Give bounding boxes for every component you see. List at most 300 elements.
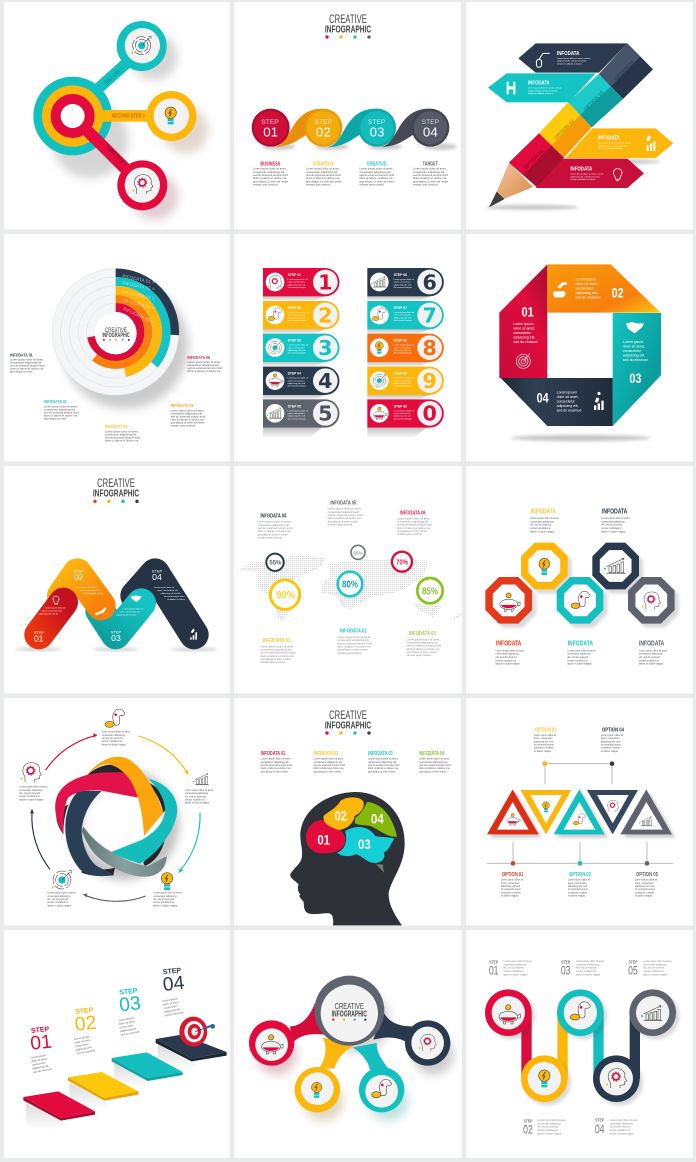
panel: hub with four nodes [234,930,462,1158]
text block: infodata 06 [397,510,432,536]
icon: chart [639,816,653,826]
step 02 circle: STEP [315,119,333,126]
connector: second step [97,110,152,122]
text 03: consectetur [623,349,642,353]
title [93,477,140,503]
text block: infodata 04: Lorem ipsum dolor sit amet, [258,521,291,524]
title: INFOGRAPHIC [325,721,372,732]
text: option 02: adipiscing elit, sed [534,740,554,743]
card 7 [367,301,444,329]
text 03: Lorem ipsum [623,340,643,344]
text: lower right: labore et dolore magna [153,904,178,907]
text: right: Lorem ipsum dolor sit amet, [185,790,214,792]
concentric rings [52,269,179,395]
arrow text: yellow: adipiscing elit, sed do eiusmod [598,144,628,147]
brain lobe 03: 03 [358,836,371,852]
arrow: yellow [138,736,187,772]
card 9: 9 [422,369,437,393]
arrow text: dark: tempor incididunt ut labore [557,62,583,65]
text block: creative: veniam quis nostrud. [359,182,385,186]
text block: infodata 05: INFODATA 05 [330,501,356,507]
triangle: yellow [520,790,571,834]
card 3 [263,334,339,362]
step 01 text: 01 [489,964,499,978]
connector: teal [593,1013,604,1079]
yellow ring [42,85,103,147]
text block: infodata 04: gna aliqua ut enim ad minim [171,420,205,424]
card 5: do eiusmod tempor [288,417,306,420]
text block: infodata 04: veniam quis nostrud. [171,423,196,427]
circle 90%: 90% [276,590,295,602]
step 02 text: labore et dolore magna [537,1132,562,1135]
arrow text: red [570,167,604,181]
text block: infodata 04 [171,403,206,427]
card 6: Lorem ipsum dolor sit [394,279,414,281]
option labels on pencil [523,59,635,171]
text block: creative: CREATIVE [367,161,387,167]
text: option 04: OPTION 04 [602,728,624,734]
text: yellow infodata: INFODATA [531,508,556,515]
text block: infodata 02: sed do eiusmod tempor incid [44,411,79,415]
card 1: amet, consectetur [288,281,305,284]
ribbon: red [55,772,138,834]
shadows [257,990,453,1121]
text: step 04: adipiscing elit, [164,1007,181,1014]
card 3: amet, consectetur [288,346,305,349]
triangle: navy [587,790,638,834]
text block: strategy: consectetur adipiscing elit, [306,170,338,174]
text: teal infodata [567,641,596,666]
text block 01: gna aliqua ut enim minim. [261,770,289,773]
text block: infodata 02 [337,629,373,655]
card shadows [263,296,430,438]
text block: infodata 02: idunt ut labore et dolore ma [44,414,78,418]
node: navy [593,1055,640,1102]
circle 65% [351,545,365,559]
icon: bulb [53,596,59,604]
step 01 circle [252,109,290,147]
step 01 text: Lorem ipsum dolor sit amet, [503,961,532,963]
arc labels: INFODATA 01 > [122,273,155,285]
arrow text: dark: INFODATA [557,51,579,57]
pencil body: dark section [599,43,653,99]
text block: infodata 03 [406,631,442,657]
title: CREATIVE [329,709,367,722]
hub circle [314,976,384,1046]
icon: target [52,871,71,889]
step 03 [111,630,122,643]
text block: infodata 04: sed do eiusmod tempor incid [258,526,293,530]
text: dark infodata: consectetur adipiscing [601,520,625,523]
text: red infodata [496,641,525,666]
text: option 05: do eiusmod tempor [635,888,655,891]
text: option 04: do eiusmod tempor [601,743,621,746]
arrow text: teal: Lorem ipsum dolor sit amet, consec [528,88,562,90]
arrow head: red [93,733,98,737]
brain lobe 02 [323,797,364,830]
icon: handshake [131,595,142,602]
text: step 02: adipiscing elit, [75,1045,93,1052]
text: option 03: amet, consectetur [568,882,587,885]
card 5: adipiscing elit, sed [288,415,306,418]
option labels on pencil: OPTION 02 [553,118,576,141]
text: option 04: adipiscing elit, sed [601,740,621,743]
octagon: red [485,577,532,624]
card 8: STEP 08 [394,339,407,343]
step 03 text [561,959,605,978]
hub title [332,1001,367,1021]
text block: strategy: Lorem ipsum dolor sit amet, [306,168,340,171]
ribbon text: adipiscing elit sed do [38,613,59,616]
text: dark infodata: labore et dolore magna [601,530,626,533]
text: teal infodata: consectetur adipiscing [567,653,591,656]
text: red infodata: INFODATA [496,641,521,648]
step 04 text: Lorem ipsum dolor sit amet, [610,1120,638,1122]
node: teal [359,1067,404,1112]
circle 65%: 65% [353,550,363,556]
text: grey infodata: INFODATA [639,641,664,648]
text block: infodata 06: Lorem ipsum dolor sit amet, [187,361,221,364]
icon: head with gear [132,175,153,194]
text: left: consectetur adipiscing [19,789,43,792]
panel: three-step network diagram [4,2,230,229]
step 02 text: STEP [523,1118,533,1124]
card 6: 6 [422,270,437,294]
card 6: STEP 06 [394,273,407,277]
card 5: 5 [318,402,333,426]
card 2 [263,301,339,329]
card 7: do eiusmod tempor [394,319,412,322]
text: option 03: Lorem ipsum dolor sit [568,880,590,882]
step 02 text: tempor incididunt ut [537,1129,558,1132]
text block: strategy: sed do eiusmod tempor incid [306,173,341,177]
text block: infodata 01: Lorem ipsum dolor sit amet, [260,645,294,648]
step 01 text: consectetur adipiscing [503,963,527,966]
text block 02: consectetur adipiscing elit, [314,761,343,764]
text: red infodata: Lorem ipsum dolor sit amet, [496,650,524,652]
text: option 04: et dolore magna. [601,750,619,753]
icon: figure [573,814,585,825]
card 6 [367,268,444,296]
text block: infodata 02: Lorem ipsum dolor sit amet, [337,636,371,639]
text block 04: INFODATA 04 [419,751,444,757]
text: option 04: incididunt ut labore [601,747,621,750]
arrow: dark [518,43,627,73]
icon: runner and bars [594,392,604,410]
text: dark infodata: tempor incididunt ut [601,527,622,530]
text block 03: gna aliqua ut enim minim. [368,770,396,773]
text: yellow infodata: Lorem ipsum dolor sit amet, [530,518,559,520]
arrow text: red: Lorem ipsum dolor sit amet, consec [570,174,604,176]
step 04 text: STEP [595,1118,605,1124]
text block: infodata 04: consectetur adipiscing elit, [258,523,290,527]
pencil body: teal section [568,74,623,127]
text: grey infodata: consectetur adipiscing [639,653,663,656]
card 0 [367,399,444,428]
text block: infodata 05: gna aliqua ut enim minim. [328,519,359,523]
text: step 01: sed do eiusmod [33,1067,52,1074]
text block 03: sed do eiusmod tempor incid [368,764,400,767]
text block: infodata 02: veniam quis nostrud. [337,651,363,655]
label: step 03: 03 [118,993,142,1016]
step 01 text [489,959,532,978]
step 01 [34,630,45,643]
card 4: do eiusmod tempor [288,385,306,388]
text block: infodata 02: INFODATA 02 [44,399,67,405]
text: option 01: adipiscing elit, sed [501,885,521,888]
text: step 02: dolor sit amet, [74,1038,91,1045]
text block: infodata 01: gna aliqua ut enim minim. [260,657,292,661]
card 3: adipiscing elit, sed [288,349,306,352]
text block: infodata 02: sed do eiusmod tempor incid [337,641,373,645]
text: step 02: sed do eiusmod [76,1048,96,1055]
step 02 text [523,1118,566,1137]
text block: strategy: idunt ut labore et dolore ma [306,176,340,180]
text: option 03: adipiscing elit, sed [568,885,588,888]
text: option 03: et dolore magna. [568,894,586,897]
step 01 text: elit, sed do eiusmod [503,967,525,970]
text: lower right: tempor incididunt ut [153,901,174,904]
node: grey [629,989,676,1036]
arrow: dark [32,812,50,869]
label: step 03: STEP [119,988,138,997]
text: step 01: consectetur [31,1061,46,1067]
step 04: STEP [152,569,163,574]
text block: target: TARGET [423,161,438,167]
pencil body: yellow section [539,102,592,158]
panel: numbered step cards [234,234,461,461]
step 04: 04 [152,572,162,582]
arrow text: yellow [598,136,632,150]
text block: infodata 04: INFODATA 04 [171,403,193,409]
text: grey infodata: Lorem ipsum dolor sit amet, [639,650,668,652]
first step node [117,21,167,71]
text block: infodata 03: sed do eiusmod tempor incid [406,644,442,648]
card 9 [367,367,444,395]
text block 04: sed do eiusmod tempor incid [419,764,451,767]
text block 02: INFODATA 02 [314,751,338,757]
card 7: STEP 07 [394,306,407,310]
arrow head: grey [83,893,87,897]
ribbon: red [39,602,63,635]
text block: creative: gna aliqua. Ut enim ad minim [359,179,395,183]
text block: infodata 01: idunt ut labore et dolore ma [10,366,44,370]
text: right: labore et dolore magna [185,802,210,805]
ribbon: yellow [274,109,329,147]
step 04 text [595,1118,639,1136]
option labels on pencil: OPTION 01 [523,148,545,171]
ribbon: teal [327,109,382,147]
text block: infodata 03: Lorem ipsum dolor sit amet, [105,431,139,434]
lower connector lines [487,842,673,863]
hub title: CREATIVE [335,1001,364,1011]
text: step 01: Lorem ipsum, [30,1054,47,1060]
step 02 text: consectetur adipiscing [537,1122,561,1125]
text: yellow infodata: elit, sed do eiusmod [530,524,552,527]
text block: business: veniam quis nostrud. [253,182,278,186]
step 03 text: tempor incididunt ut [576,970,597,973]
text: option 05 [635,872,658,897]
card 0: do eiusmod tempor [394,417,412,420]
step 05 text: tempor incididunt ut [643,970,664,973]
arrow text: red: tempor incididunt ut labore [570,178,596,181]
text: option 02: incididunt ut labore [534,747,554,750]
text block 02: idunt ut labore et dolore ma [314,767,344,770]
arc labels: INFODATA 02 > [122,280,155,292]
text 04: sed do eiusmod [557,408,581,412]
text block: target [413,161,449,186]
step 03 circle: STEP [368,119,386,126]
step 2 slab [68,1072,138,1101]
text block: infodata 04: INFODATA 04 [260,514,286,520]
arrow text: yellow: tempor incididunt ut labore [598,147,624,150]
soft shadows [52,33,208,220]
node: navy [405,1020,450,1066]
label: step 04: 04 [162,973,186,996]
text: lower left: Lorem ipsum dolor sit amet, [47,893,76,895]
card 3: STEP 03 [288,339,301,343]
arrow text: dark: Lorem ipsum dolor sit amet, consec [557,58,591,60]
card 2: adipiscing elit, sed [288,316,306,319]
ribbon: dark [135,573,194,635]
arc labels [122,273,155,325]
step 1 slab [23,1091,95,1121]
arrow: teal [488,73,596,102]
octagon: dark [592,543,639,589]
text block: infodata 01: sed do eiusmod tempor incid [260,651,296,655]
text: option 05: OPTION 05 [636,872,658,878]
text block: infodata 06: idunt ut labore et dolore ma [187,369,221,373]
step 02: 02 [74,572,84,582]
text block: infodata 01: sed do eiusmod tempor incid [10,363,45,367]
centre disc [95,312,137,354]
text block 01: Lorem ipsum dolor sit amet, [261,758,291,761]
text: option 02: do eiusmod tempor [534,743,554,746]
arrow: red [46,736,95,770]
text: dark infodata: INFODATA [602,508,627,515]
panel: four steps with swirl [234,2,461,229]
text block 01: INFODATA 01 [261,751,285,757]
text: step 03: Lorem ipsum, [118,1017,134,1022]
arc: red [91,307,140,356]
text block: infodata 05: veniam quis nostrud. [328,522,353,526]
text 02: Lorem ipsum [576,277,596,281]
step 03: STEP [111,630,122,635]
text block: infodata 03 [105,424,140,443]
text block: creative: consectetur adipiscing elit, [359,170,391,174]
text block: infodata 03: INFODATA 03 [105,424,128,430]
text block: target: veniam quis nostrud. [413,182,438,186]
arrow: teal [181,813,200,870]
label: step 01: STEP [31,1026,50,1035]
text: right: consectetur adipiscing [185,792,209,795]
card 1: 1 [318,270,333,294]
text block 03: consectetur adipiscing elit, [368,761,397,764]
segment 01 red [499,264,547,378]
text block: business: gna aliqua. Ut enim ad minim [253,179,289,183]
text block: target: idunt ut labore et dolore ma [413,176,447,180]
step 04 text: 04 [595,1122,605,1136]
connector: third step [85,128,132,175]
step 04 circle: STEP [422,119,440,126]
text block 01 [261,751,293,773]
black back bands [56,765,168,876]
text block 03: idunt ut labore et dolore ma [368,767,398,770]
arrow text: yellow: Lorem ipsum dolor sit amet, consec [598,143,632,145]
ribbon text: amet, consectetur elit [157,589,178,592]
ribbon: grey [82,827,167,877]
text block: infodata 04: gna aliqua ut enim minim. [258,532,289,536]
card 7: 7 [422,303,437,327]
text block: infodata 04 [258,514,293,539]
step 04 circle: 04 [423,125,438,140]
text block: infodata 03: sed do eiusmod tempor incid [105,436,140,440]
text block 04: consectetur adipiscing elit, [419,761,448,764]
text: dark infodata [601,508,630,533]
text 01: consectetur [513,331,532,335]
number 01: 01 [522,303,534,319]
text block: infodata 04: sed do eiusmod tempor incid [171,414,206,418]
step 01 circle: STEP [261,119,279,126]
label: step 02: STEP [75,1007,94,1016]
icon: target [516,353,530,368]
text block: infodata 01 [260,638,296,664]
step 01 circle: 01 [263,125,278,140]
brain wedge [376,864,384,873]
panel: world map with percentages [234,466,463,693]
text: option 01: incididunt ut labore [501,891,521,894]
card 2: do eiusmod tempor [288,319,306,322]
text: top: labore et dolore magna [102,743,126,746]
octagon shadows [489,547,679,628]
text block: strategy: gna aliqua. Ut enim ad minim [306,179,342,183]
text block: strategy [306,161,342,186]
circle 55%: 55% [269,560,281,567]
card 4: Lorem ipsum dolor sit [288,378,308,380]
text: step 03: dolor sit amet, [118,1019,136,1026]
step 04 text: elit, sed do eiusmod [610,1126,631,1129]
text: teal infodata: INFODATA [568,641,593,648]
text: option 03: do eiusmod tempor [568,888,588,891]
card 3: Lorem ipsum dolor sit [288,345,308,347]
step 03 circle: 03 [370,125,384,140]
ribbon text: Lorem ipsum dolor sit [123,608,143,610]
text block 02 [314,751,346,773]
step 03 text: STEP [561,959,571,965]
text block: target: sed do eiusmod tempor incid [413,173,448,177]
text block: business [253,161,289,186]
card 2: 2 [318,303,333,327]
triangle: grey [620,789,672,834]
third step node [117,160,167,210]
text: option 01 [501,872,524,897]
text block: infodata 05: idunt ut labore et dolore ma [328,516,361,520]
text block: infodata 01 [10,352,45,373]
icon: bulb [542,802,550,812]
card 2: amet, consectetur [288,314,305,317]
text: teal infodata: labore et dolore magna [567,663,592,666]
text: step 03: sed do eiusmod [120,1029,140,1037]
text: option 05: amet, consectetur [635,882,654,885]
text block: infodata 06: consectetur adipiscing elit, [187,363,219,367]
head silhouette [290,792,405,925]
shadows [488,993,679,1105]
step 05 text: consectetur adipiscing [643,963,667,966]
ribbon text: amet, consectetur elit [80,589,101,592]
step 4 slab [156,1035,227,1061]
arc labels: INFODATA 05 > [122,306,155,325]
text: lower left: consectetur adipiscing [47,895,71,898]
